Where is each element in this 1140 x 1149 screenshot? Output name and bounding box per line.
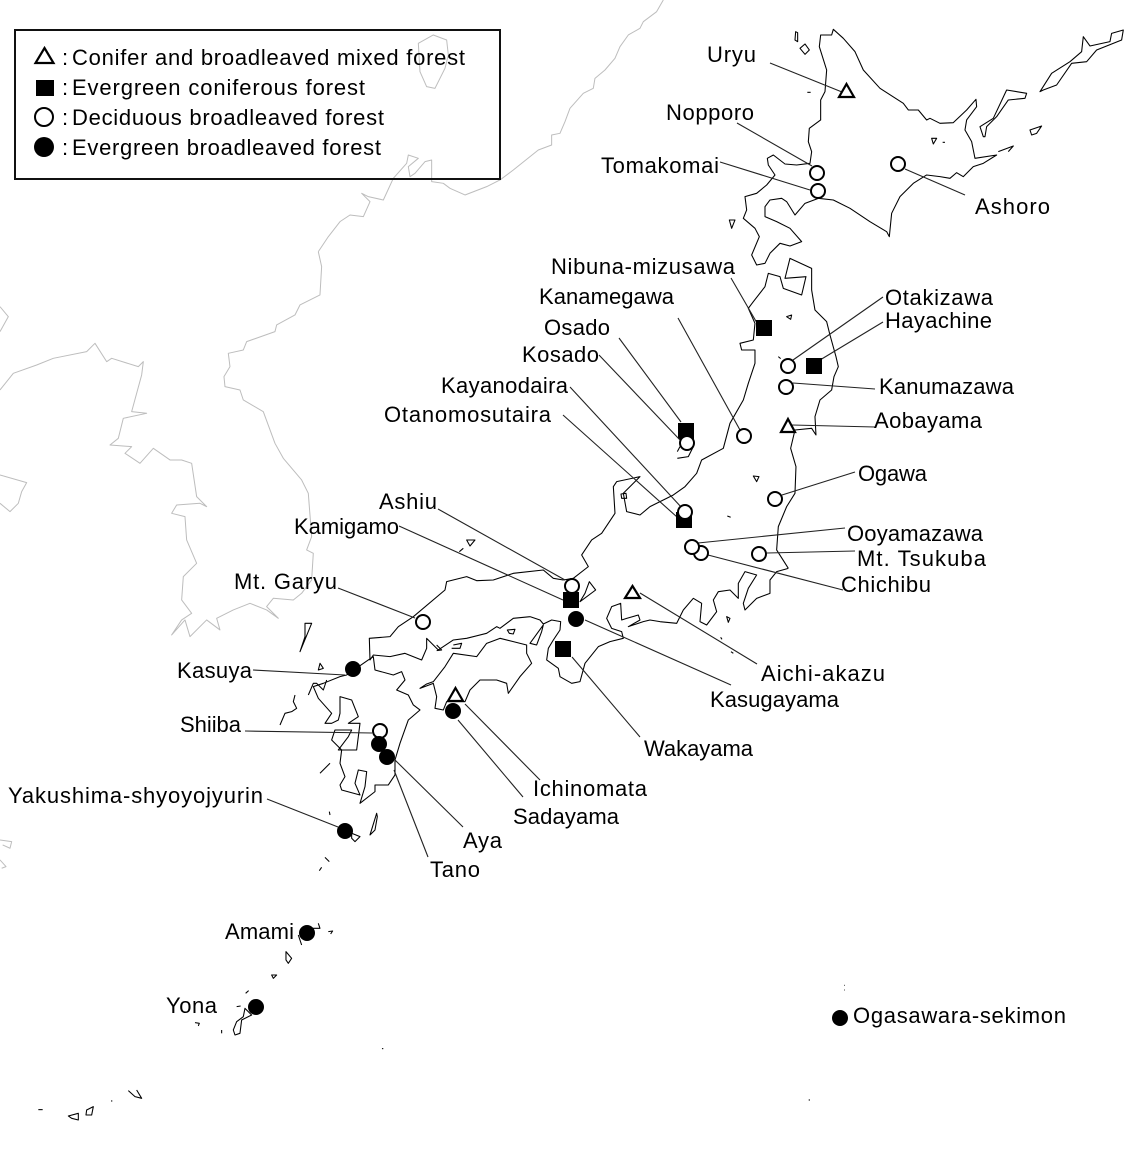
site: Kanamegawa: Kanamegawa [539, 284, 675, 309]
site: Kanumazawa [779, 374, 1015, 399]
site: Ogawa [768, 461, 928, 506]
site: Kamigamo: Kamigamo [294, 514, 399, 539]
Honshu Tokai and Kii coast [530, 568, 788, 683]
site: Kanamegawa [539, 284, 751, 443]
site: Ichinomata: Ichinomata [533, 776, 648, 801]
site: Ogasawara-sekimon: Ogasawara-sekimon [853, 1003, 1066, 1028]
site: Yakushima-shyoyojyurin: Yakushima-shyoyojyurin [8, 783, 263, 808]
site: Ashoro [891, 157, 1050, 219]
site: Hayachine [806, 308, 992, 374]
legend [15, 30, 500, 179]
site: Ashoro: Ashoro [975, 194, 1050, 219]
site: Shiiba: Shiiba [180, 712, 242, 737]
Hokkaido and northern islands [729, 29, 1123, 265]
site: Ooyamazawa [685, 521, 984, 554]
Western Japan: Chugoku, Shikoku, Kyushu [280, 540, 563, 842]
legend item: evergreen broadleaved forest: : [62, 135, 68, 160]
site: Yakushima-shyoyojyurin [8, 783, 353, 839]
site: Aichi-akazu: Aichi-akazu [761, 661, 885, 686]
site: Sadayama [445, 703, 620, 829]
site: Amami: Amami [225, 919, 294, 944]
site: Kosado: Kosado [522, 342, 599, 367]
site: Aya: Aya [463, 828, 503, 853]
site: Ashiu: Ashiu [379, 489, 437, 514]
site: Kasugayama: Kasugayama [710, 687, 840, 712]
site: Otanomosutaira [384, 402, 692, 528]
site: Yona: Yona [166, 993, 218, 1018]
site: Wakayama [555, 641, 754, 761]
Ogasawara and other small islets [809, 985, 845, 1100]
legend item: deciduous broadleaved forest: : [62, 105, 68, 130]
site: Uryu: Uryu [707, 42, 756, 67]
site: Mt. Tsukuba: Mt. Tsukuba [857, 546, 987, 571]
site: Ooyamazawa: Ooyamazawa [847, 521, 984, 546]
site: Mt. Tsukuba [752, 546, 987, 571]
legend item: conifer and broadleaved mixed forest: : [62, 45, 68, 70]
site: Ichinomata [448, 688, 648, 801]
site: Tomakomai: Tomakomai [601, 153, 719, 178]
site: Ogawa: Ogawa [858, 461, 928, 486]
site: Otakizawa: Otakizawa [885, 285, 994, 310]
site: Kayanodaira [441, 373, 692, 519]
legend item: conifer and broadleaved mixed forest: Conifer and broadleaved mixed forest [72, 45, 465, 70]
site: Tano [371, 736, 480, 882]
legend item: deciduous broadleaved forest: Deciduous broadleaved forest [72, 105, 384, 130]
site: Mt. Garyu [234, 569, 430, 629]
site: Yona [166, 993, 264, 1018]
site: Otakizawa [781, 285, 994, 373]
Ryukyu islands [38, 857, 383, 1120]
site: Mt. Garyu: Mt. Garyu [234, 569, 337, 594]
site: Kosado [522, 342, 694, 450]
site: Sadayama: Sadayama [513, 804, 620, 829]
Honshu north and east coast [563, 258, 838, 580]
site: Kanumazawa: Kanumazawa [879, 374, 1015, 399]
site: Kamigamo [294, 514, 579, 608]
site: Kasugayama [568, 611, 840, 712]
site: Otanomosutaira: Otanomosutaira [384, 402, 552, 427]
site: Nibuna-mizusawa: Nibuna-mizusawa [551, 254, 736, 279]
site: Kayanodaira: Kayanodaira [441, 373, 569, 398]
site: Hayachine: Hayachine [885, 308, 992, 333]
site: Tano: Tano [430, 857, 480, 882]
site: Uryu [707, 42, 854, 97]
site: Aobayama [781, 408, 983, 433]
site: Nopporo [666, 100, 824, 180]
site: Osado [544, 315, 694, 439]
site: Nopporo: Nopporo [666, 100, 754, 125]
site: Aobayama: Aobayama [874, 408, 983, 433]
site: Aichi-akazu [625, 586, 885, 686]
site: Osado: Osado [544, 315, 610, 340]
legend item: evergreen coniferous forest: : [62, 75, 68, 100]
legend item: evergreen broadleaved forest: Evergreen broadleaved forest [72, 135, 381, 160]
site: Tomakomai [601, 153, 825, 198]
site: Chichibu: Chichibu [841, 572, 931, 597]
site: Kasuya [177, 658, 361, 683]
site: Kasuya: Kasuya [177, 658, 253, 683]
site: Shiiba [180, 712, 387, 738]
site: Aya [379, 749, 503, 853]
site: Wakayama: Wakayama [644, 736, 754, 761]
legend item: evergreen coniferous forest: Evergreen coniferous forest [72, 75, 365, 100]
site: Chichibu [694, 546, 931, 597]
mainland Asia coastline in gray [0, 0, 663, 868]
site: Ashiu [379, 489, 579, 593]
site: Nibuna-mizusawa [551, 254, 772, 336]
